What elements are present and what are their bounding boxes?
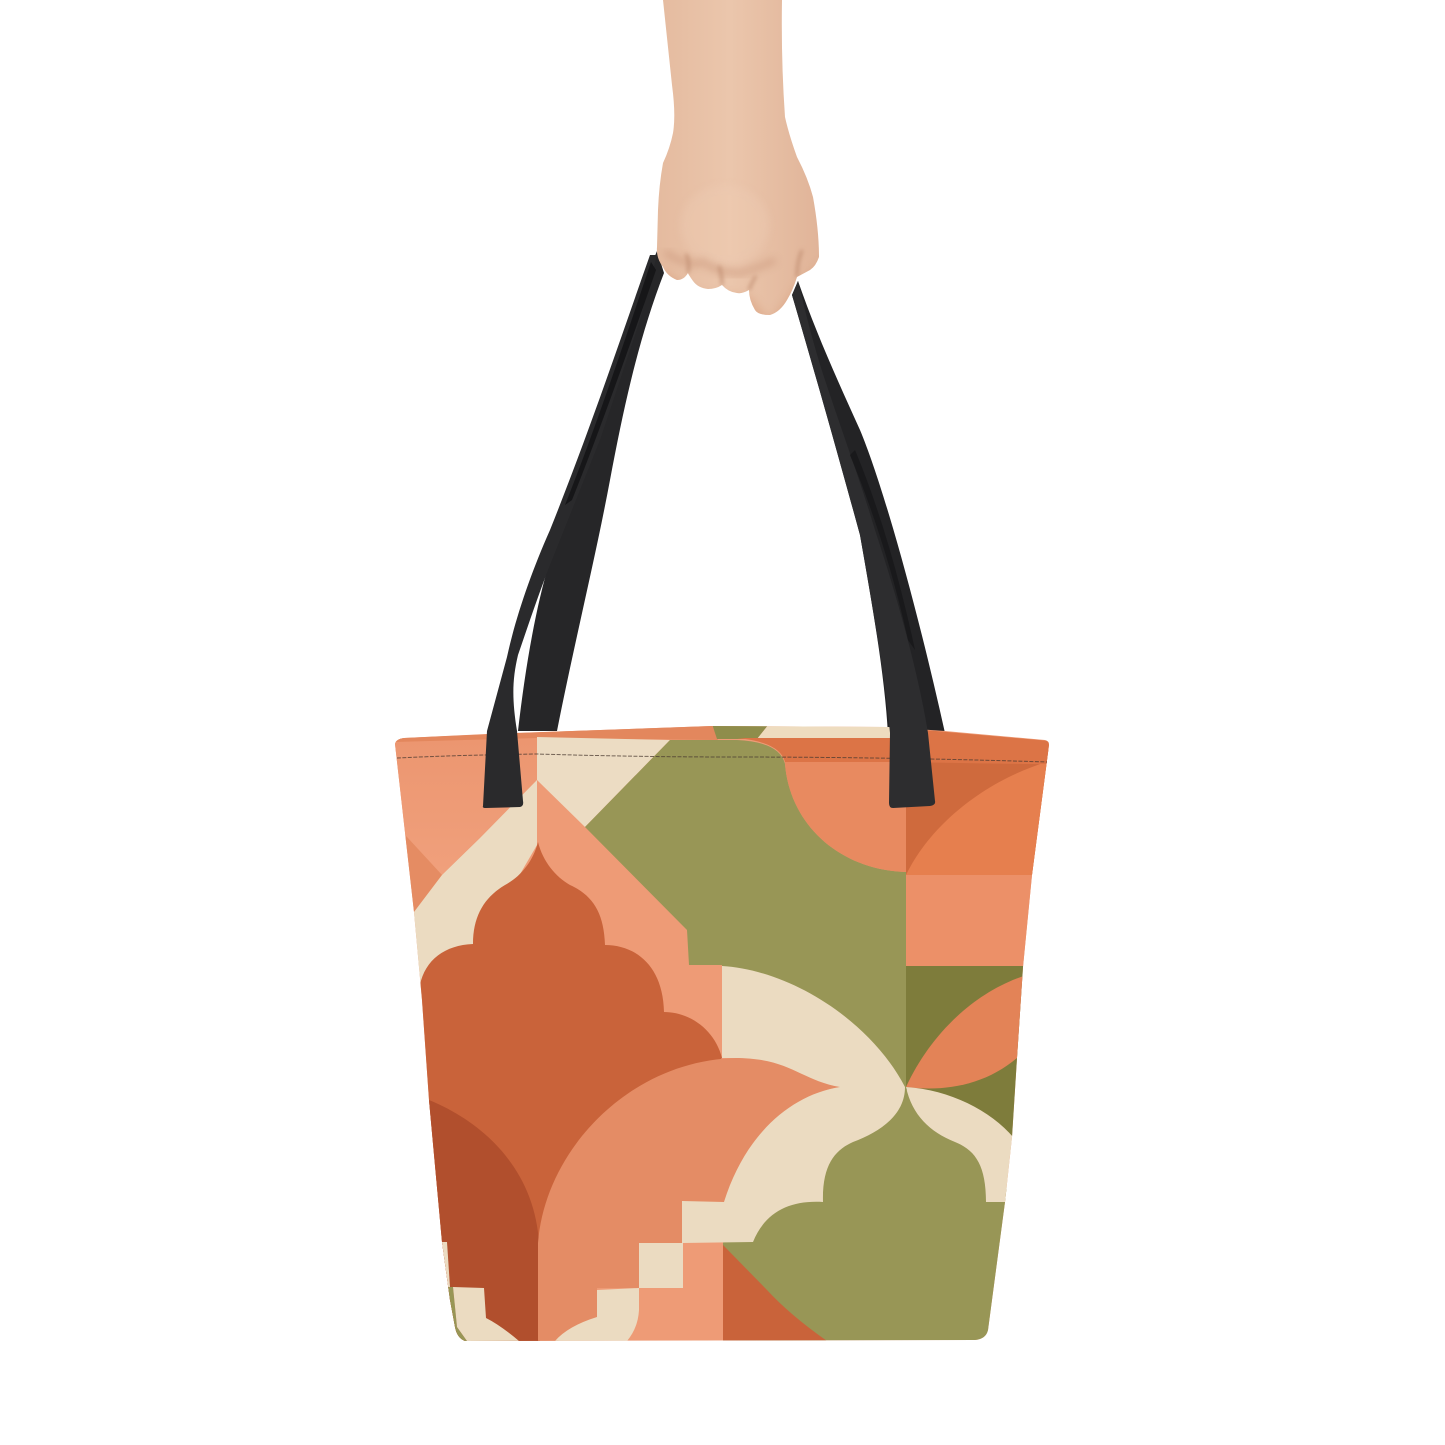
stitching line bbox=[397, 754, 1047, 762]
bottom orange triangle bbox=[723, 1245, 827, 1341]
front left handle strap bbox=[483, 255, 657, 808]
back rim cream bbox=[758, 726, 890, 738]
left strap dark fold bbox=[565, 262, 656, 505]
right leaf bbox=[906, 974, 1030, 1088]
lower olive dome bbox=[723, 1090, 1007, 1340]
salmon half circle bbox=[785, 760, 906, 872]
salmon fan bbox=[538, 1058, 840, 1341]
top right rim band bbox=[737, 727, 1050, 764]
top right dark wedge bbox=[906, 750, 1056, 875]
salmon rectangle bbox=[906, 875, 1036, 966]
cream staircase square bbox=[639, 1243, 683, 1288]
cream diagonal strip bbox=[414, 780, 537, 982]
back handle strap left bbox=[518, 251, 664, 731]
dark lower-left dome bbox=[425, 1098, 539, 1345]
lower left olive corner bbox=[448, 1287, 467, 1341]
fingertip tone bbox=[665, 269, 811, 315]
knuckle highlight bbox=[680, 185, 770, 265]
cream top panel bbox=[537, 737, 670, 827]
tote bag photo bbox=[395, 0, 1049, 1341]
lower left cream strip bbox=[442, 1242, 450, 1287]
top right leaf bbox=[906, 761, 1050, 875]
left darker triangle bbox=[404, 834, 442, 912]
lower left cream step bbox=[453, 1287, 519, 1341]
cream right band bbox=[906, 1087, 1014, 1202]
dark olive panel bbox=[906, 966, 1030, 1140]
back rim olive bbox=[712, 726, 768, 739]
top left salmon panel bbox=[395, 738, 406, 836]
front right handle strap bbox=[792, 281, 935, 808]
base salmon bbox=[390, 720, 1060, 1350]
back handle strap right bbox=[792, 281, 945, 735]
bag body bbox=[390, 720, 1060, 1350]
right strap dark fold bbox=[850, 450, 915, 650]
hand and arm bbox=[656, 0, 819, 315]
cream arc band bbox=[682, 966, 905, 1243]
knuckle shadows bbox=[665, 252, 775, 274]
dome dark orange bbox=[420, 842, 722, 1341]
olive large field bbox=[585, 740, 906, 1090]
back rim orange bbox=[395, 725, 718, 742]
finger creases bbox=[686, 250, 802, 290]
cream staircase bottom step bbox=[555, 1288, 639, 1341]
